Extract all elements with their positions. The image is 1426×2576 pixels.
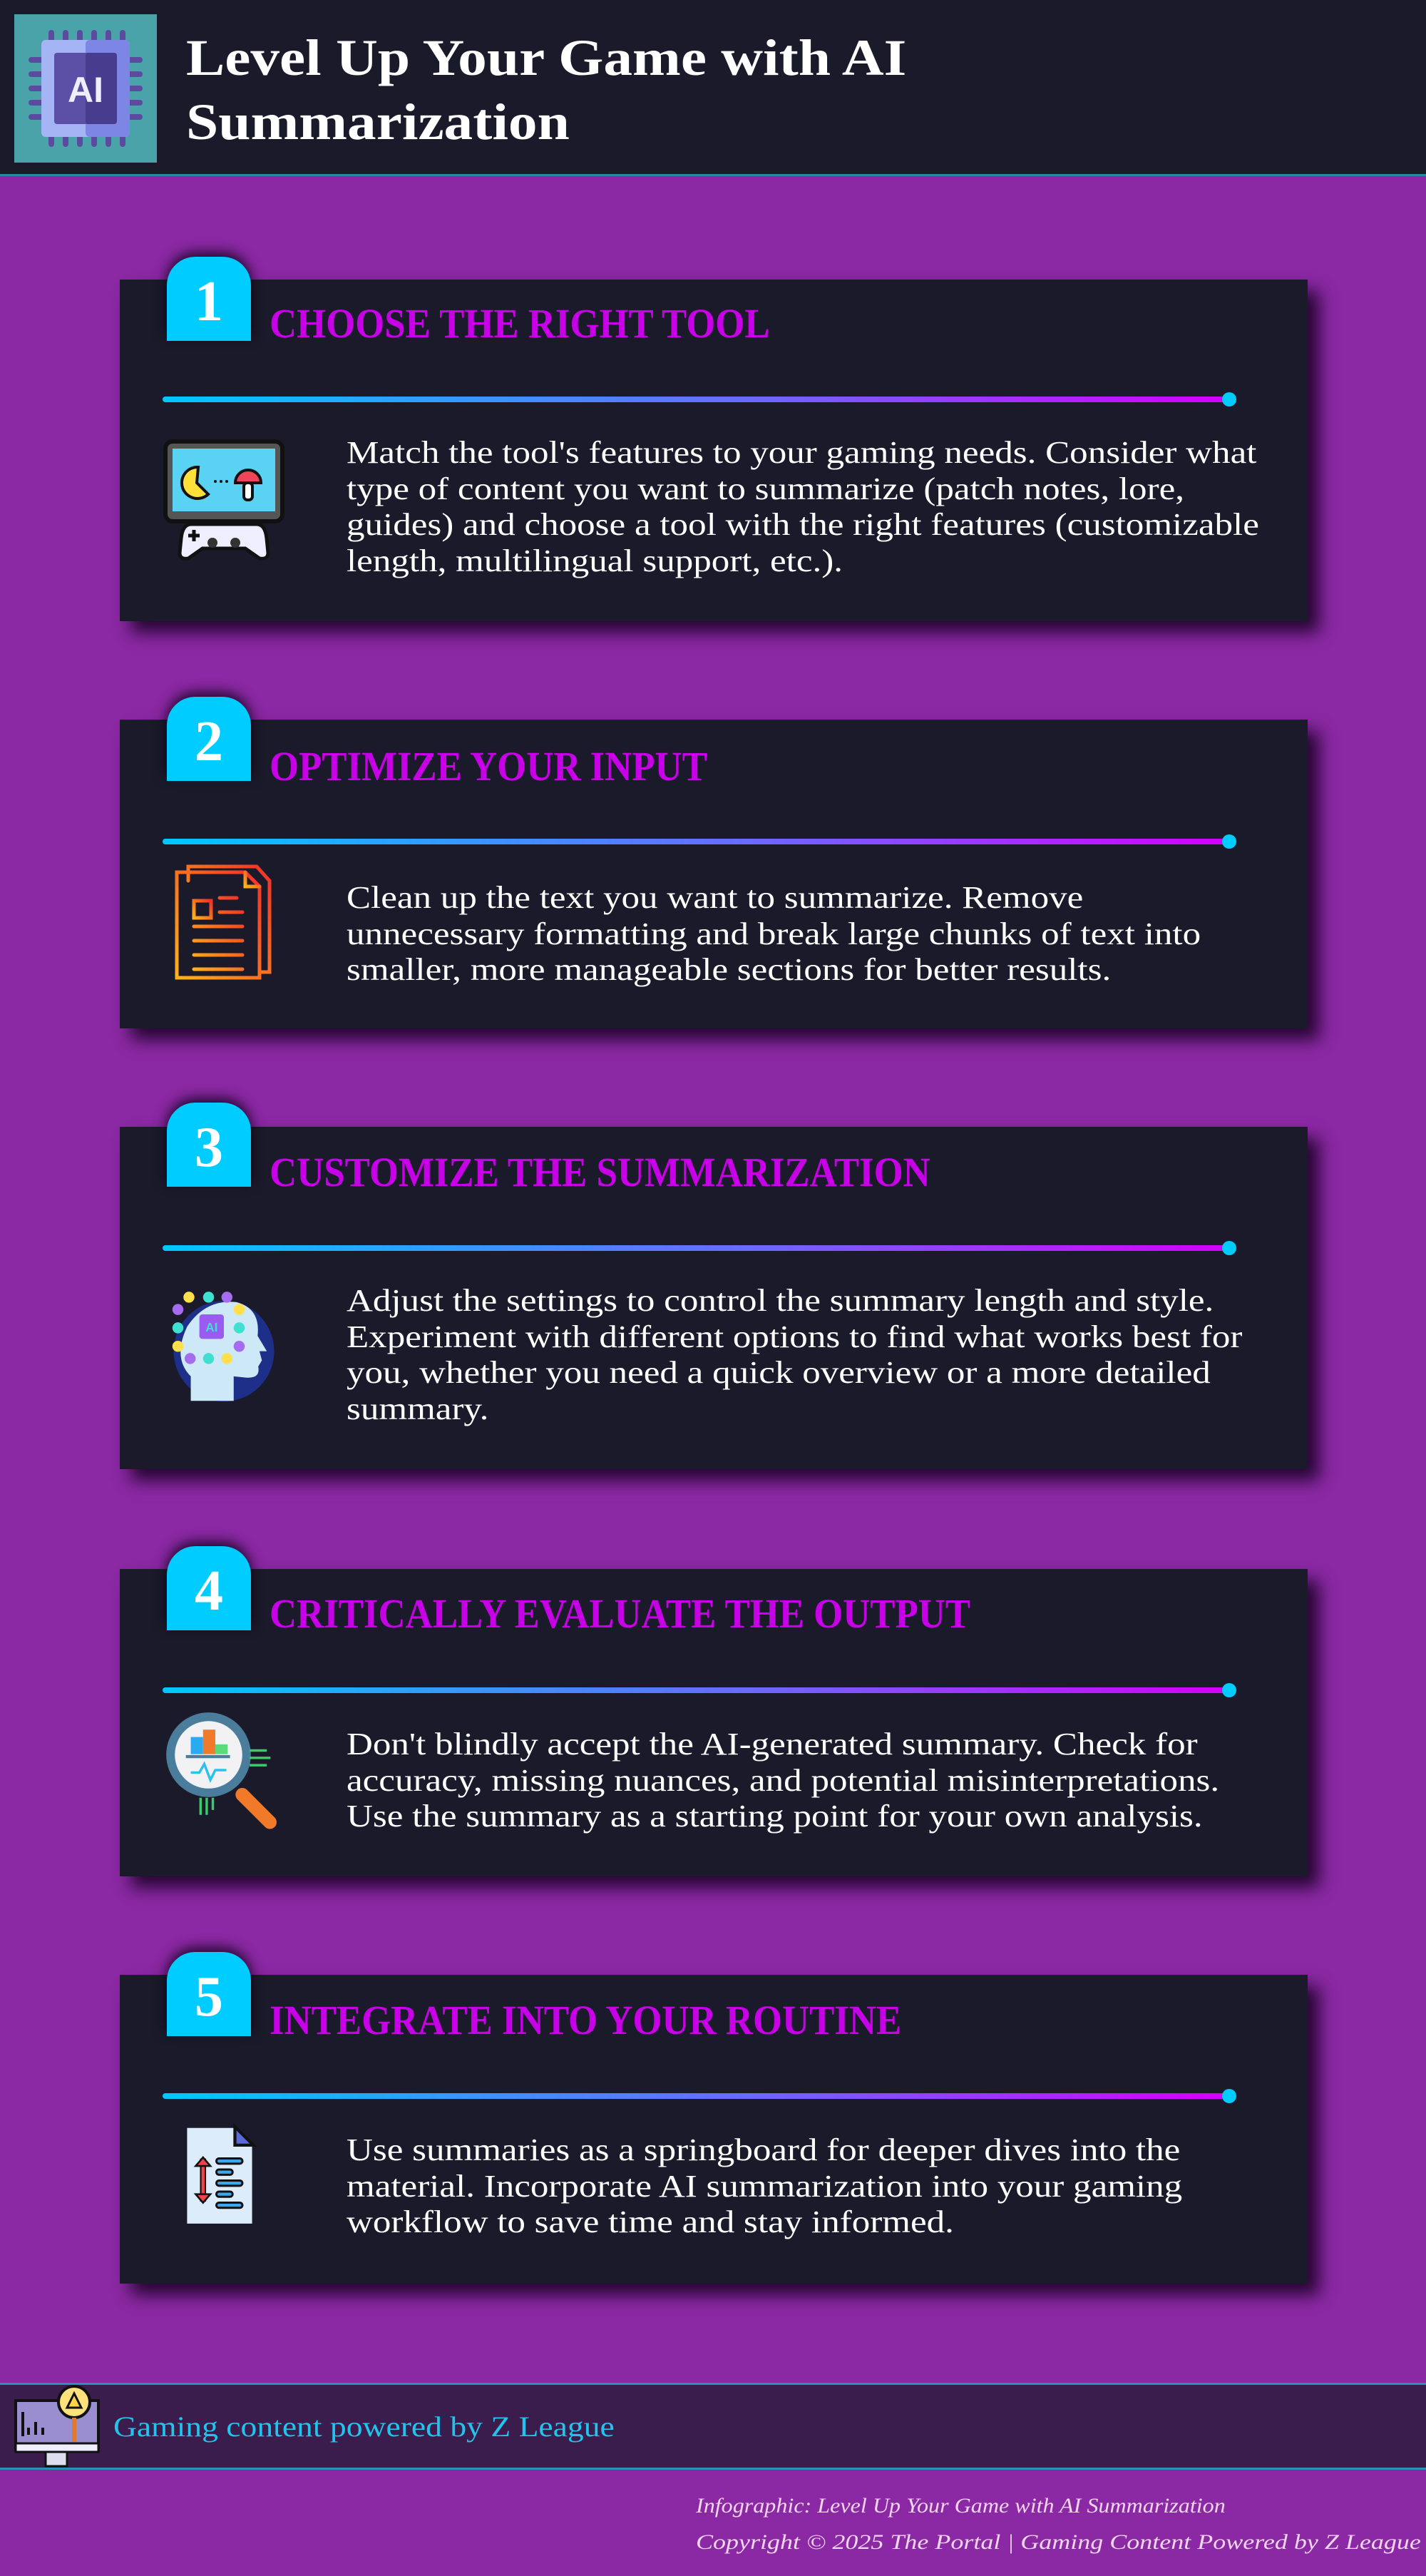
text 2: unnecessary formatting and break large chunks of text into bbox=[347, 916, 1201, 951]
icon: AI chip: AI bbox=[68, 70, 103, 110]
badge 5: 5 bbox=[195, 1966, 223, 2028]
icon: documents bbox=[175, 864, 271, 980]
panel: step 2 bbox=[120, 720, 1308, 1028]
heading 1: CHOOSE THE RIGHT TOOL bbox=[270, 300, 770, 347]
text 3: you, whether you need a quick overview or a more detailed bbox=[347, 1355, 1211, 1390]
title: Level Up Your Game with AI bbox=[186, 29, 906, 86]
icon: magnifier chart bbox=[166, 1712, 277, 1829]
divider line 3 bbox=[163, 1245, 1225, 1251]
text 5: Use summaries as a springboard for deeper dives into the bbox=[347, 2132, 1180, 2167]
panel: step 4 bbox=[120, 1569, 1308, 1876]
badge 2 bbox=[167, 697, 251, 781]
text 1: type of content you want to summarize (patch notes, lore, bbox=[347, 471, 1184, 506]
text 1: guides) and choose a tool with the right features (customizable bbox=[347, 507, 1259, 542]
footer text: Gaming content powered by Z League bbox=[113, 2411, 615, 2443]
dot 3 bbox=[1222, 1241, 1236, 1255]
copyright bbox=[696, 2494, 1421, 2554]
copyright: Infographic: Level Up Your Game with AI Summarization bbox=[696, 2494, 1226, 2518]
divider line 2 bbox=[163, 839, 1225, 844]
text 1: Match the tool's features to your gaming needs. Consider what bbox=[347, 435, 1256, 470]
badge 4 bbox=[167, 1546, 251, 1630]
title bbox=[186, 29, 906, 150]
dot 2 bbox=[1222, 834, 1236, 849]
heading 2: OPTIMIZE YOUR INPUT bbox=[270, 743, 707, 789]
icon: document length bbox=[187, 2123, 257, 2224]
text 1 bbox=[347, 435, 1259, 578]
heading 4: CRITICALLY EVALUATE THE OUTPUT bbox=[270, 1590, 970, 1637]
badge 1: 1 bbox=[195, 270, 223, 333]
icon: AI head bbox=[173, 1292, 274, 1402]
badge 1 bbox=[167, 257, 251, 341]
text 1: length, multilingual support, etc.). bbox=[347, 543, 843, 578]
text 5 bbox=[347, 2132, 1182, 2239]
footer bar bbox=[0, 2383, 1426, 2470]
heading 5: INTEGRATE INTO YOUR ROUTINE bbox=[270, 1997, 901, 2043]
badge 3: 3 bbox=[195, 1116, 223, 1179]
text 4 bbox=[347, 1727, 1219, 1834]
badge 4: 4 bbox=[195, 1560, 223, 1622]
text 2: smaller, more manageable sections for better results. bbox=[347, 952, 1111, 987]
text 2 bbox=[347, 880, 1201, 987]
panel: step 5 bbox=[120, 1975, 1308, 2284]
text 5: material. Incorporate AI summarization into your gaming bbox=[347, 2168, 1182, 2204]
text 3 bbox=[347, 1283, 1242, 1426]
text 4: accuracy, missing nuances, and potential misinterpretations. bbox=[347, 1763, 1219, 1797]
icon: monitor with alert bbox=[14, 2385, 100, 2468]
dot 5 bbox=[1222, 2089, 1236, 2103]
divider line 1 bbox=[163, 397, 1225, 402]
icon: AI head: AI bbox=[205, 1320, 217, 1334]
dot 4 bbox=[1222, 1683, 1236, 1697]
text 3: Adjust the settings to control the summary length and style. bbox=[347, 1283, 1214, 1318]
panel: step 3 bbox=[120, 1127, 1308, 1469]
badge 2: 2 bbox=[195, 710, 223, 773]
header bbox=[0, 0, 1426, 176]
text 4: Use the summary as a starting point for your own analysis. bbox=[347, 1799, 1203, 1834]
divider line 4 bbox=[163, 1687, 1225, 1693]
badge 3 bbox=[167, 1103, 251, 1187]
heading 3: CUSTOMIZE THE SUMMARIZATION bbox=[270, 1149, 930, 1195]
divider line 5 bbox=[163, 2093, 1225, 2099]
copyright: Copyright © 2025 The Portal | Gaming Content Powered by Z League bbox=[696, 2530, 1421, 2554]
badge 5 bbox=[167, 1952, 251, 2036]
text 2: Clean up the text you want to summarize. Remove bbox=[347, 880, 1083, 915]
icon: game monitor bbox=[163, 439, 284, 561]
icon: AI chip bbox=[14, 14, 157, 163]
panel: step 1 bbox=[120, 280, 1308, 621]
title: Summarization bbox=[186, 93, 570, 150]
text 4: Don't blindly accept the AI-generated summary. Check for bbox=[347, 1727, 1198, 1762]
dot 1 bbox=[1222, 392, 1236, 407]
text 5: workflow to save time and stay informed. bbox=[347, 2204, 954, 2239]
text 3: summary. bbox=[347, 1391, 488, 1426]
text 3: Experiment with different options to find what works best for bbox=[347, 1319, 1242, 1354]
